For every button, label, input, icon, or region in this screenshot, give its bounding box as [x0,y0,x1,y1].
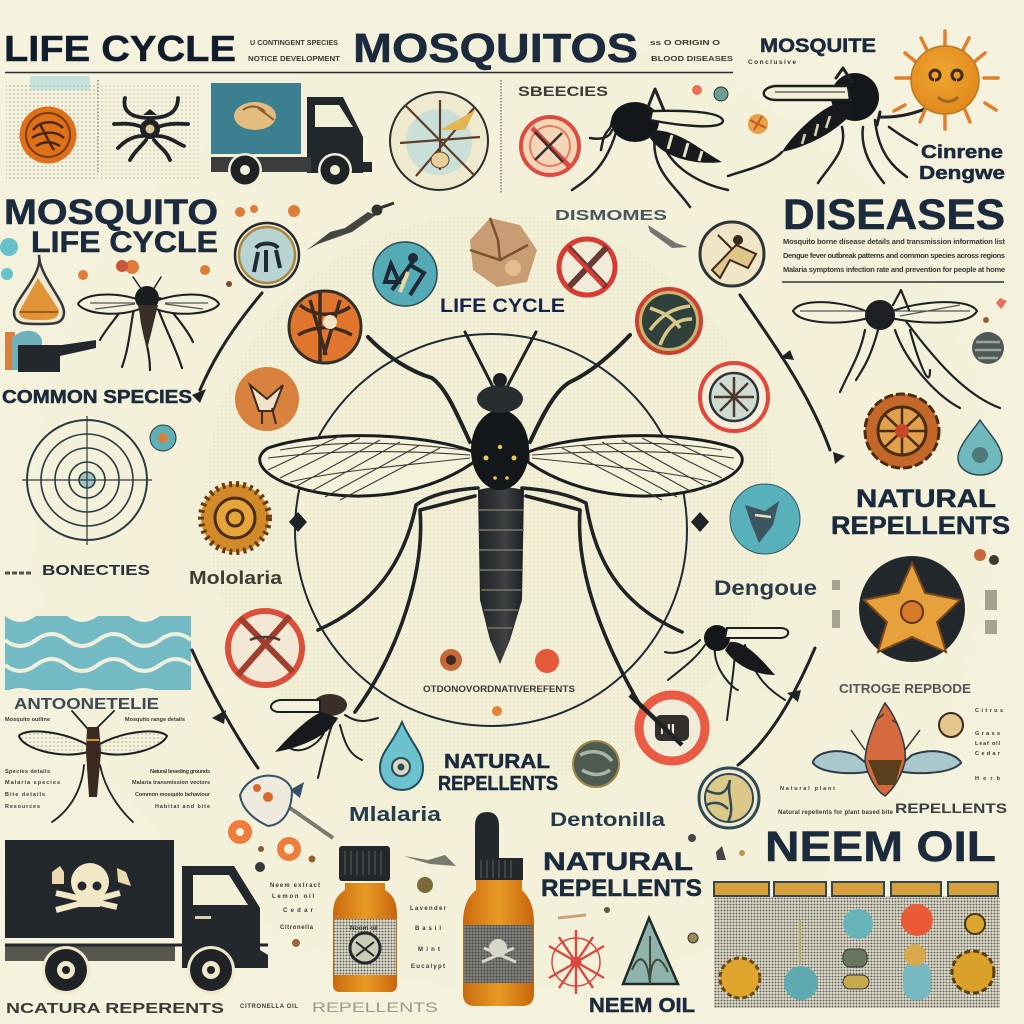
thorax [471,410,529,490]
label: dengue: Dengoue [714,577,817,600]
illustration: mosquito top view left [78,277,219,370]
label: natural repellents center: NATURAL [444,751,550,773]
left wing [260,436,474,496]
small text list lower left: Natural breeding grounds [150,769,210,775]
heading: natural repellents lower: REPELLENTS [541,875,702,902]
small text list lower left: Resources [5,804,40,810]
heading: natural repellents right: REPELLENTS [831,512,1010,540]
label: dismomes: DISMOMES [555,208,667,224]
illustration: mosquito right small [665,625,788,720]
diseases rule [782,281,1004,283]
label: antooneilie: ANTOONETELIE [14,696,159,713]
icon: ring badge tan [235,223,299,287]
icon: orange flower left [201,484,269,552]
outer cycle arrow: lower right [738,648,815,765]
label: cinrene dengwe [919,142,1005,183]
icon: no-entry mosquito [521,117,579,175]
heading: natural repellents right: NATURAL [856,485,996,513]
header: mosquite label: MOSQUITE [760,36,876,57]
label: cinrene dengwe: Cinrene [921,142,1003,162]
diamonds on circle [289,512,709,532]
label: repellents faded [240,999,438,1015]
small text right: Cedar [975,751,1001,757]
antennae [465,332,536,385]
icon: sun with face [894,31,998,129]
small text column beside truck: Basil [415,926,441,932]
icon: star flower medallion [859,556,965,662]
label: life cycle center: LIFE CYCLE [440,296,565,317]
heading: mosquito life cycle: MOSQUITO [4,193,218,232]
heading: natural repellents lower [541,848,702,902]
central halftone halo [205,215,775,785]
right wing [528,436,742,496]
small text list lower left: Malaria transmission vectors [132,780,210,786]
label: repellents right [778,800,1007,816]
arrow between bottles [404,855,456,866]
small icons right [972,298,1007,364]
icon: teal drop [380,722,423,790]
illustration: mosquito top view lower left [19,711,167,822]
panel: top-left dotted swatch with orange disc [6,76,98,180]
icon: brown blob [470,218,537,287]
label: cinrene dengwe: Dengwe [919,163,1005,183]
heading: diseases: DISEASES [783,191,1005,239]
small marks neem [688,834,745,860]
outer cycle arrow: upper left [192,293,262,403]
arrow tips right [833,452,845,464]
jar 3 [830,882,889,1008]
small decorative spots top right [692,85,768,134]
small text list lower left [5,717,211,810]
outer cycle arrow: lower left [192,650,258,768]
small spots centre [440,649,559,716]
icon: amber bottle small [333,846,397,992]
small text column beside truck: Lemon oil [272,894,314,900]
small text right: Leaf oil [975,741,1000,747]
panel: spider icon [98,80,200,180]
label: species: SBEECIES [518,83,608,99]
small text column beside truck: Cedar [283,908,314,914]
small oil marks [558,907,698,943]
illustration: mosquito lower left small [271,694,378,778]
icon: tan crossed badge [700,222,764,286]
header: small caption right: ss O ORIGIN O [650,40,721,47]
label: repellents faded: CITRONELLA OIL [240,1004,298,1010]
small text right: Grass [975,731,1000,737]
head [477,385,523,413]
icon: flask [0,238,64,324]
small text right: Citrus [975,708,1003,714]
arrow: short right [648,225,688,248]
small garbled centre caption: OTDONOVORDNATIVEREFENTS [423,684,575,694]
icon: red no-entry with needle [630,695,705,761]
header: small caption right [650,40,733,63]
illustration: water waves [5,610,191,696]
small text list lower left: Species details [5,769,50,775]
small text list lower left: Common mosquito behaviour [135,792,211,798]
jar 1 [714,882,772,1008]
icon: neem leaf triangle [623,918,678,984]
heading: common species: COMMON SPECIES [2,387,192,407]
icon: orange patterned flower right [865,394,939,468]
label: repellents right: Natural repellents for plant based bite [778,810,894,816]
icon: red green badge [637,289,701,353]
icon: red no-entry with needle: NI [660,721,675,738]
panel: five jars [714,882,1000,1008]
text block: diseases body: Dengue fever outbreak patterns and common species across regions [783,251,1005,260]
small text right [780,708,1003,792]
header rule [5,72,733,74]
label: repellents faded: REPELLENTS [312,999,438,1015]
small text list lower left: Mosquito outline [5,717,50,723]
header: mosquite label [748,36,876,66]
small text list lower left: Bite details [5,792,45,798]
icon: teal badge right [730,484,800,554]
label: malaria left: Mololaria [189,568,283,588]
text block: diseases body: Mosquito borne disease details and transmission information list [783,237,1006,246]
icon: teal drop right [958,420,1002,475]
small text column beside truck [270,883,447,970]
label: repellents right: REPELLENTS [895,800,1007,816]
header: small caption left: NOTICE DEVELOPMENT [248,56,341,63]
small marks right [832,549,999,634]
illustration: mosquito side view one [572,89,728,207]
header: mosquite label: Conclusive [748,59,796,66]
label: natural repellents center [438,751,558,795]
small text right: Herb [975,776,1001,782]
label: neem oil small: NEEM OIL [589,995,695,1017]
small text column beside truck: Neem extract [270,883,320,889]
small text list lower left: Habitat and bite [155,804,210,810]
icon: orange badge [235,367,299,431]
icon: teal badge [373,242,437,306]
small text right: Natural plant [780,786,835,792]
dotted divider [500,80,502,193]
label: bonecties: BONECTIES [42,562,150,579]
jar 4 [889,882,946,1008]
jar 2 [772,882,830,1008]
label: natural repellents center: REPELLENTS [438,773,558,795]
label: natural repellents bottom: NCATURA REPERENTS [6,1000,224,1017]
icon: amber bottle small: Noom oil [350,925,378,932]
icon: dark medallion [573,741,619,787]
header: mosquitos title: MOSQUITOS [353,25,638,71]
icon: delivery truck [211,83,372,187]
text block: diseases body: Malaria symptoms infection rate and prevention for people at home [783,265,1005,274]
small text column beside truck: Eucalypt [411,964,445,970]
orange rings near truck [228,820,433,947]
icon: ring with pattern [699,768,759,828]
illustration: mosquito side view two [728,68,945,183]
label: dentonilla: Dentonilla [550,810,666,831]
big circle frame [295,334,687,726]
small text column beside truck: Lavender [410,906,447,912]
outer cycle arrow: upper right [740,295,830,450]
icon: small teal badge [150,425,176,451]
small text list lower left: Mosquito range details [125,717,185,723]
illustration: orange winged moth [813,703,963,796]
legs front [368,335,630,442]
icon: machine block [5,331,96,372]
chart: target circles [22,416,152,545]
jar 5 [946,882,1000,1008]
icon: crossed compass circle [390,92,488,190]
small text column beside truck: Mint [418,947,440,953]
icon: red no symbol lower left [228,611,302,685]
icon: amber dropper bottle [463,812,534,1006]
heading: neem oil: NEEM OIL [765,823,996,871]
header: life cycle title: LIFE CYCLE [4,28,236,69]
central mosquito illustration [260,332,742,738]
icon: red no symbol [559,239,615,295]
icon: skull truck [5,840,268,994]
abdomen [478,487,524,664]
label: malaria bottom: Mlalaria [349,804,442,826]
header: small caption right: BLOOD DISEASES [651,56,733,63]
small text column beside truck: Citronella [280,925,314,931]
heading: mosquito life cycle [4,193,218,259]
icon: red ring badge [700,363,768,431]
illustration: mosquito top view right [793,290,1000,408]
small orange marks [78,205,300,287]
label: citrouge repellents: CITROGE REPBODE [839,681,971,696]
arrow: top curved arrow [307,203,394,250]
icon: orange patterned disc [289,291,361,363]
text block: diseases body [783,237,1006,274]
heading: mosquito life cycle: LIFE CYCLE [31,226,218,259]
small text list lower left: Malaria species [5,780,60,786]
heading: natural repellents right [831,485,1010,540]
heading: natural repellents lower: NATURAL [543,848,693,876]
header: small caption left: U CONTINGENT SPECIES [250,40,338,47]
icon: magnifier with specimen [240,776,333,838]
legs middle and back [318,488,682,738]
icon: red star wheel [549,930,604,994]
header: small caption left [248,40,341,63]
